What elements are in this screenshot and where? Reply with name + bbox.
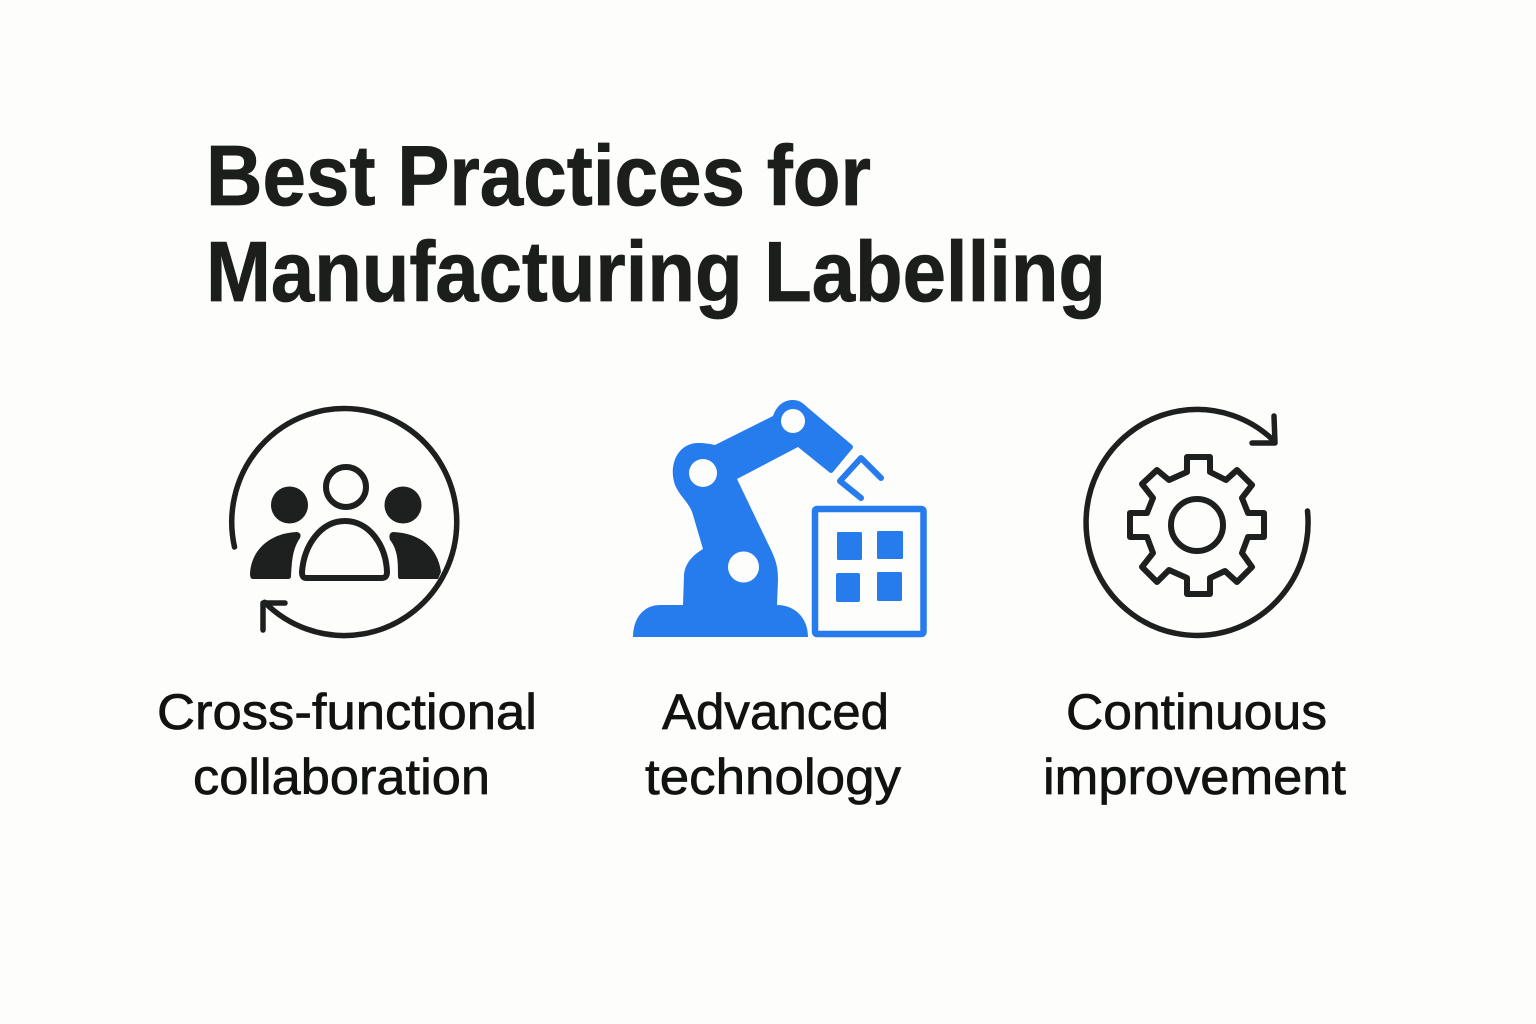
column: advanced technology (633, 400, 924, 805)
icon: gear in a circular arrow (1086, 409, 1308, 635)
label: advanced technology: technology (645, 749, 901, 805)
label: cross-functional collaboration: Cross-functional (157, 684, 537, 740)
label: continuous improvement: improvement (1043, 749, 1346, 805)
label sheet (815, 509, 924, 634)
column: continuous improvement (1043, 409, 1346, 805)
label: cross-functional collaboration: collaboration (193, 749, 490, 805)
right person (384, 486, 441, 579)
gear (1130, 457, 1264, 594)
label: advanced technology: Advanced (662, 684, 889, 740)
gripper (840, 458, 881, 498)
circular arrow (1086, 409, 1308, 635)
title (206, 129, 1106, 320)
label: cross-functional collaboration (157, 684, 537, 805)
column: cross-functional collaboration (157, 409, 537, 805)
centre person (302, 467, 387, 578)
title: Manufacturing Labelling (206, 225, 1106, 320)
left person (250, 486, 308, 579)
icon: robot arm and label sheet (633, 400, 924, 637)
label: continuous improvement (1043, 684, 1346, 805)
robot arm (633, 400, 853, 637)
label: advanced technology (645, 684, 901, 805)
title: Best Practices for (206, 129, 871, 224)
circular arrow (232, 409, 457, 636)
label: continuous improvement: Continuous (1066, 684, 1327, 740)
icon: team in a circular arrow (232, 409, 457, 636)
